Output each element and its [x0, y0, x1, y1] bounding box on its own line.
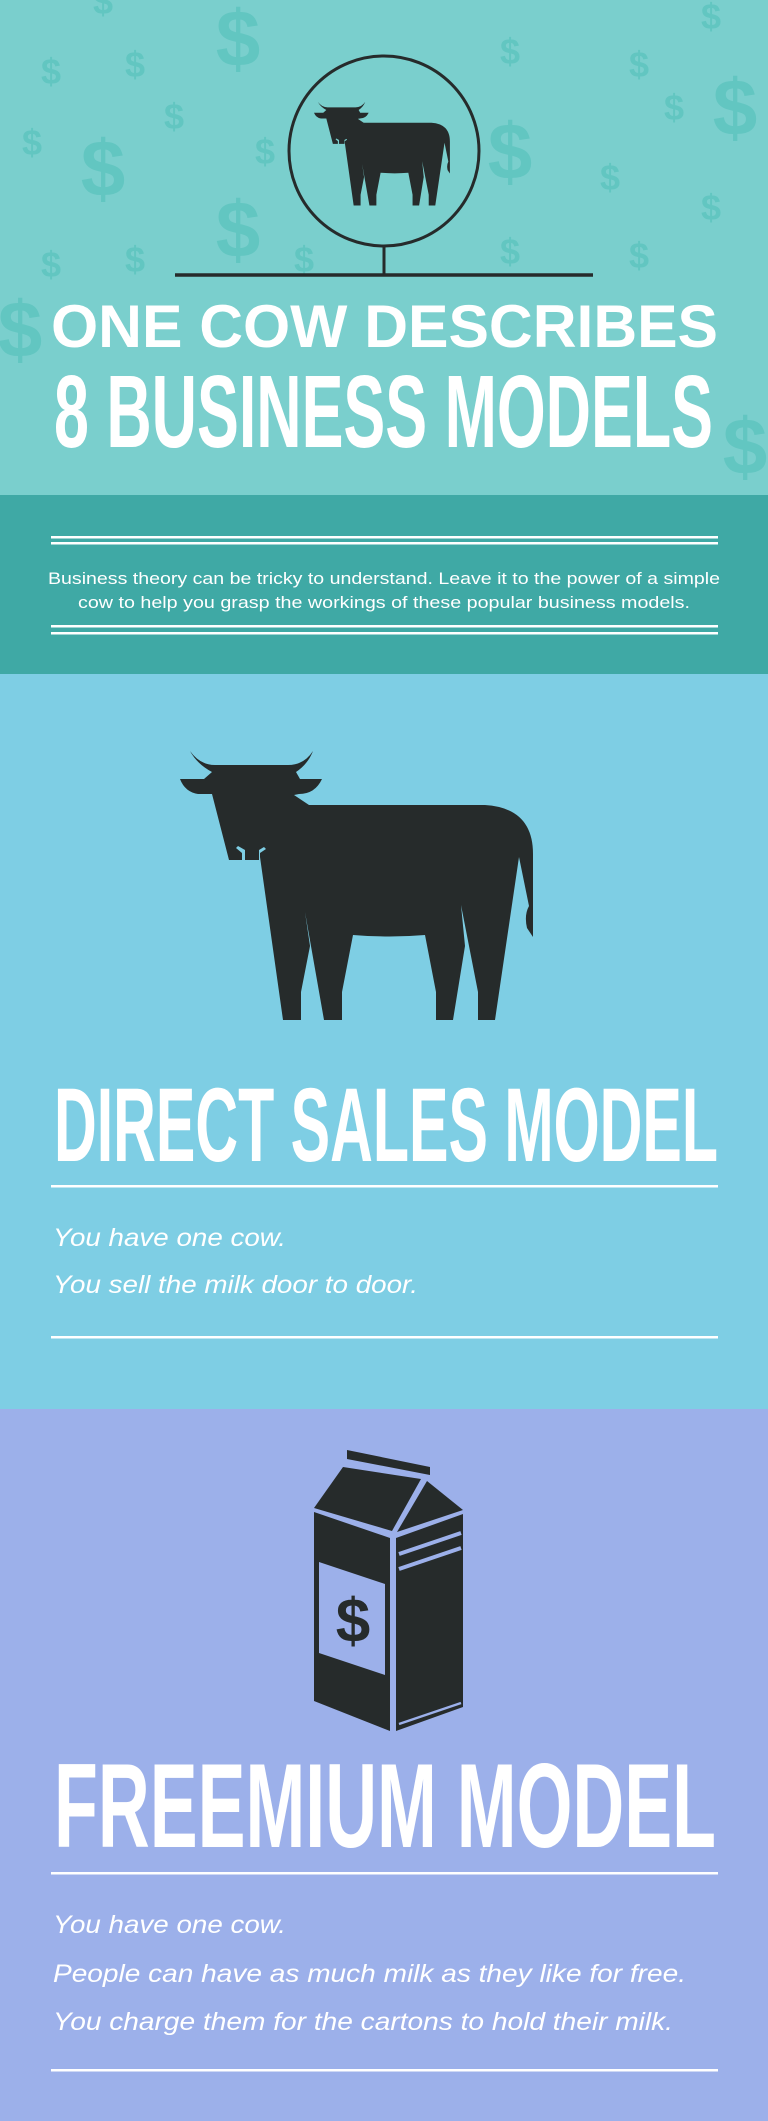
- icon: cow: [180, 751, 533, 1020]
- intro text: [48, 569, 720, 612]
- description text: [53, 1911, 686, 2036]
- dollar pattern background: $: [701, 187, 721, 228]
- icon: milk carton: $: [336, 1587, 370, 1656]
- dollar pattern background: $: [125, 239, 145, 280]
- description text: You sell the milk door to door.: [53, 1271, 418, 1299]
- dollar pattern background: $: [629, 44, 649, 85]
- panel: freemium model: [0, 1409, 768, 2121]
- dollar pattern background: $: [600, 157, 620, 198]
- dollar pattern background: $: [664, 87, 684, 128]
- dollar pattern background: $: [500, 31, 520, 72]
- dollar pattern background: $: [629, 235, 649, 276]
- dollar pattern background: $: [216, 185, 260, 274]
- dollar pattern background: $: [488, 107, 532, 196]
- description text: People can have as much milk as they like for free.: [53, 1960, 686, 1988]
- dollar pattern background: $: [41, 244, 61, 285]
- dollar pattern background: $: [294, 239, 314, 280]
- dollar pattern background: [0, 0, 767, 491]
- intro text: Business theory can be tricky to understand. Leave it to the power of a simple: [48, 569, 720, 588]
- dollar pattern background: $: [81, 124, 125, 213]
- dollar pattern background: $: [723, 402, 767, 491]
- description text: [53, 1224, 418, 1299]
- intro text: cow to help you grasp the workings of these popular business models.: [78, 593, 690, 612]
- dollar pattern background: $: [22, 122, 42, 163]
- icon: milk carton: [314, 1450, 463, 1731]
- dollar pattern background: $: [255, 131, 275, 172]
- title: [51, 293, 718, 469]
- title: ONE COW DESCRIBES: [51, 293, 718, 360]
- description text: You have one cow.: [53, 1224, 286, 1252]
- intro band: [0, 495, 768, 674]
- icon: cow in circle on pedestal: [175, 56, 593, 275]
- dollar pattern background: $: [164, 96, 184, 137]
- description text: You have one cow.: [53, 1911, 286, 1939]
- description text: You charge them for the cartons to hold their milk.: [53, 2008, 673, 2036]
- dollar pattern background: $: [713, 63, 757, 152]
- dollar pattern background: $: [500, 231, 520, 272]
- dollar pattern background: $: [125, 44, 145, 85]
- dollar pattern background: $: [41, 51, 61, 92]
- panel: direct sales model: [0, 674, 768, 1409]
- header background: [0, 0, 768, 495]
